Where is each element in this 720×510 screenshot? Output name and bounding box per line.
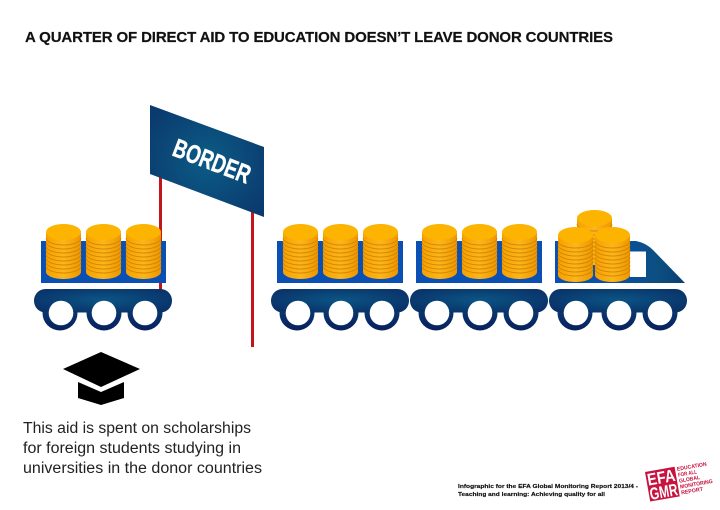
wagon 2 [271, 224, 409, 330]
logo: EFA GMR: EFA [646, 466, 677, 490]
caption: universities in the donor countries [23, 460, 262, 477]
border post: left [159, 170, 162, 290]
logo: EFA GMR: GMR [648, 480, 679, 504]
border sign: BORDER [169, 133, 255, 190]
logo: EFA GMR: FOR ALL [678, 469, 698, 479]
wagon: crossed the border [34, 224, 172, 330]
border post: right [251, 205, 254, 347]
caption: This aid is spent on scholarships [23, 420, 251, 437]
logo: EFA GMR: MONITORING [680, 479, 713, 491]
border sign [150, 105, 264, 217]
wagon 3 [410, 224, 548, 330]
logo: EFA GMR: EDUCATION [677, 462, 707, 473]
credit text: Infographic for the EFA Global Monitoring Report 2013/4 - [458, 484, 638, 490]
icon: graduation cap [63, 352, 140, 405]
title: A QUARTER OF DIRECT AID TO EDUCATION DOESN’T LEAVE DONOR COUNTRIES [25, 29, 613, 46]
locomotive [549, 210, 687, 330]
credit text: Teaching and learning: Achieving quality for all [458, 492, 606, 498]
logo: EFA GMR [645, 459, 716, 504]
logo: EFA GMR: GLOBAL [679, 475, 701, 485]
logo: EFA GMR: REPORT [681, 487, 704, 496]
caption: for foreign students studying in [23, 440, 241, 457]
